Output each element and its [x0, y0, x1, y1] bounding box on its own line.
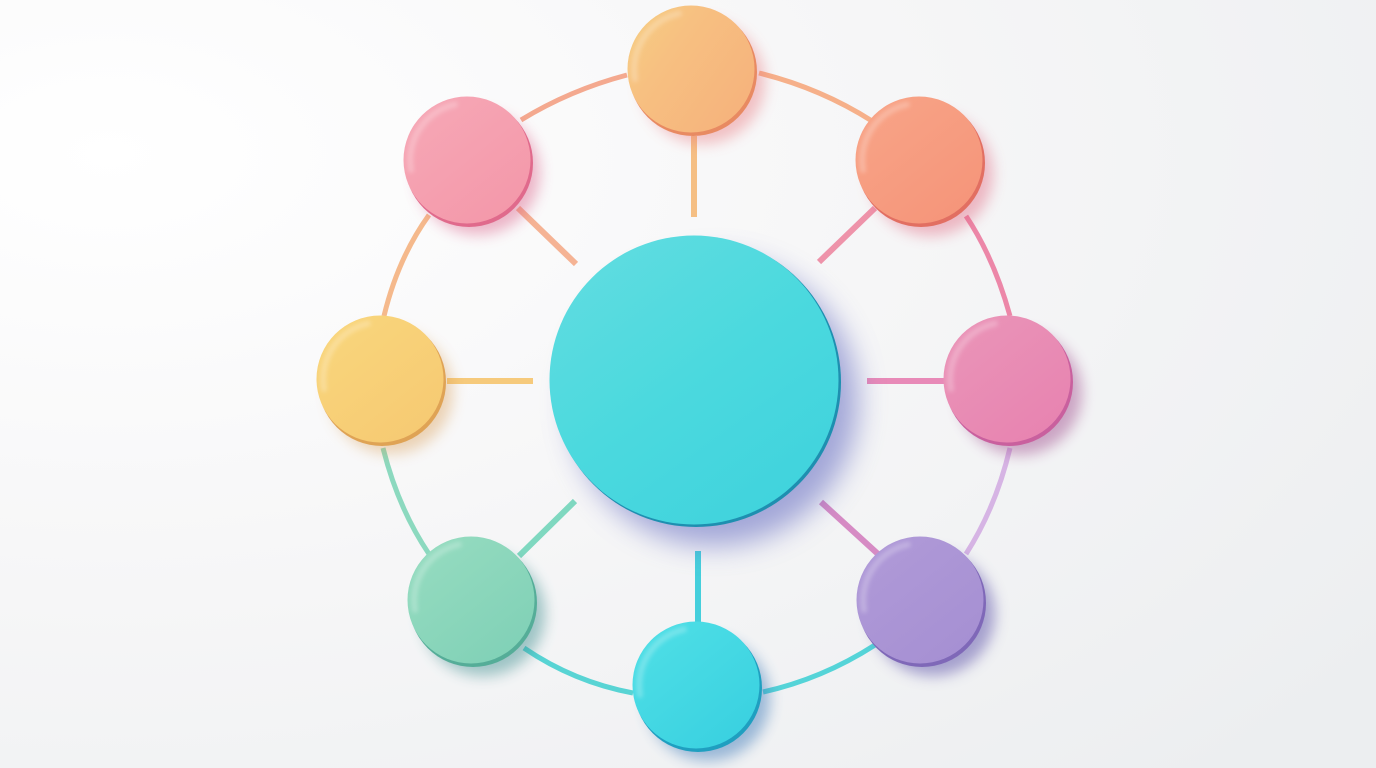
outer ring arcs [383, 73, 1010, 693]
node: lower left green [408, 536, 545, 676]
node: left yellow [316, 316, 453, 454]
node: right pink [944, 316, 1082, 455]
node: upper left rose [404, 96, 540, 235]
central hub [550, 236, 858, 546]
node: bottom cyan [632, 622, 770, 761]
node: top orange [628, 6, 765, 144]
node: upper right coral [856, 96, 993, 236]
spokes [447, 136, 945, 624]
node: lower right purple [856, 536, 995, 676]
